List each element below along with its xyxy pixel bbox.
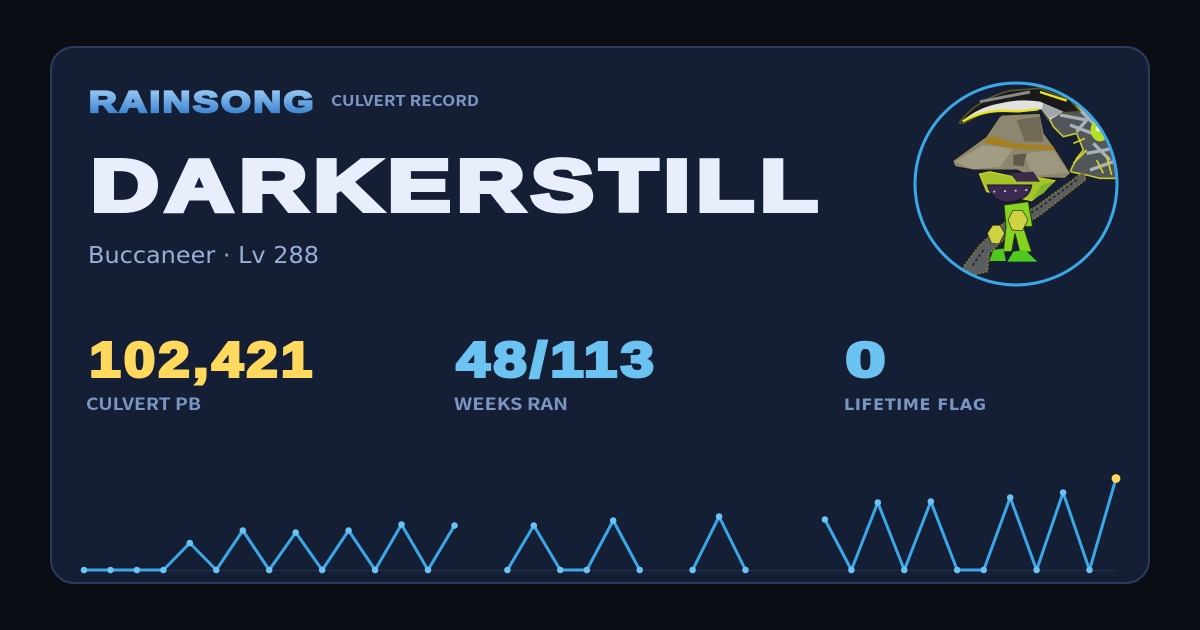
scythe handle	[963, 173, 1086, 275]
subtitle: culvert record: CULVERT RECORD	[331, 90, 479, 111]
avatar ring	[915, 83, 1117, 285]
stat: weeks ran: WEEKS RAN	[454, 391, 568, 415]
hat band	[983, 137, 1054, 151]
goblin face	[979, 172, 1055, 201]
class and level: Buccaneer · Lv 288	[88, 243, 319, 269]
player name: DARKERSTILL	[91, 146, 824, 226]
scythe mechanism	[1047, 100, 1117, 178]
goblin feet	[989, 248, 1037, 262]
stat: weeks ran: 48/113	[456, 334, 658, 388]
stat: lifetime flag	[844, 334, 986, 414]
hat	[953, 113, 1071, 178]
stat: weeks ran	[454, 334, 658, 415]
stat: culvert PB: 102,421	[90, 334, 316, 388]
scythe blade	[959, 88, 1080, 123]
line chart: weekly scores	[81, 474, 1120, 573]
stat: culvert PB: CULVERT PB	[86, 391, 201, 415]
card panel	[51, 47, 1149, 583]
avatar: scythe character	[953, 88, 1117, 275]
stat: lifetime flag: LIFETIME FLAG	[844, 395, 986, 414]
armor plates	[1008, 211, 1028, 231]
goblin mouth	[987, 185, 1032, 202]
goblin body	[1003, 202, 1033, 253]
stat: culvert PB	[86, 334, 316, 415]
stat: lifetime flag: 0	[846, 334, 886, 388]
brand logo: RAINSONG: RAINSONG	[89, 86, 316, 119]
